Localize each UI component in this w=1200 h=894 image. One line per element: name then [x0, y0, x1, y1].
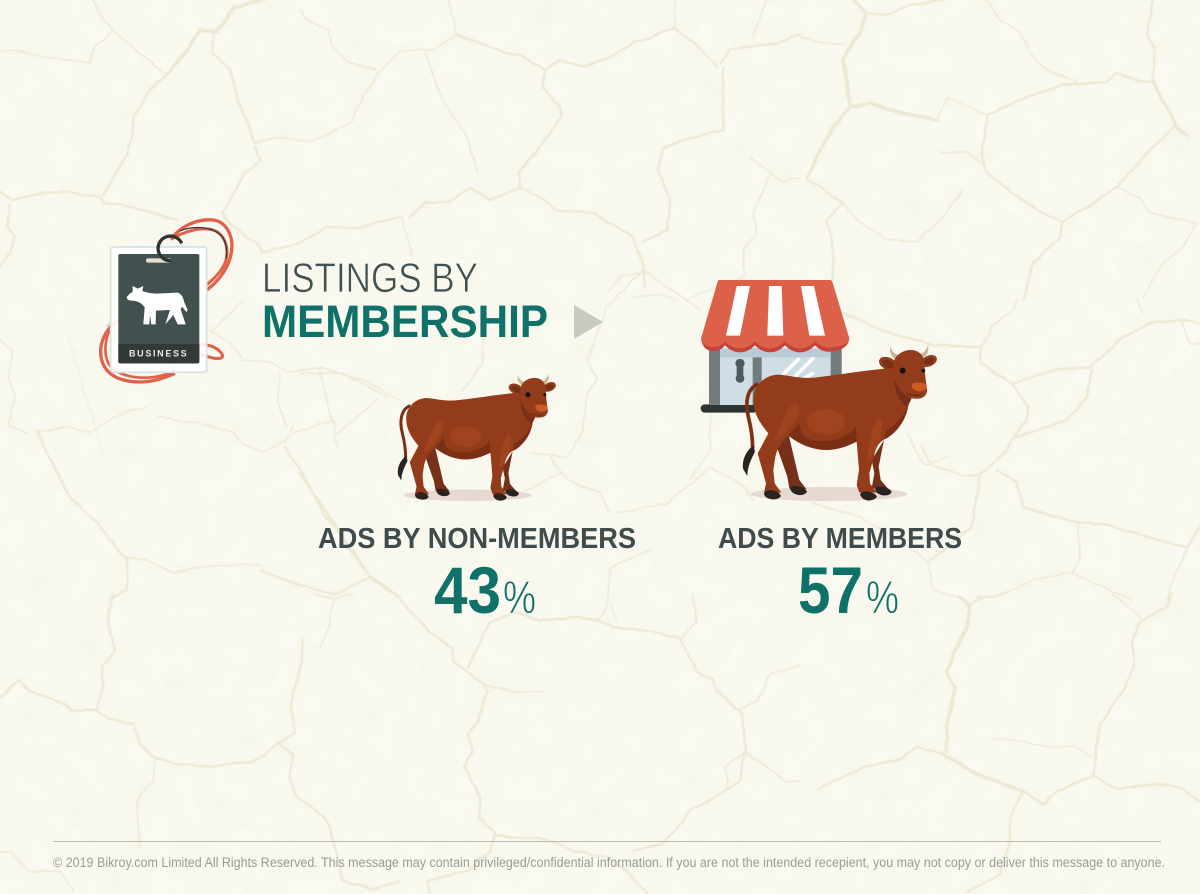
stat: 43 percent: 43: [434, 553, 501, 627]
icon: shop stall: [701, 280, 849, 413]
label: ads by members: ADS BY MEMBERS: [718, 523, 962, 555]
icon: cow, non-members: [398, 374, 557, 501]
arrow: [574, 305, 603, 339]
title: [262, 254, 548, 347]
stat: 57 percent: %: [866, 571, 899, 623]
icon: business membership badge with lanyard: [101, 220, 232, 382]
label: ads by non-members: ADS BY NON-MEMBERS: [318, 523, 636, 555]
title: LISTINGS BY: [262, 254, 478, 301]
icon: cow, members: [743, 345, 939, 501]
stat: 43 percent: %: [503, 571, 536, 623]
title: MEMBERSHIP: [262, 296, 548, 347]
icon: business membership badge with lanyard: BUSINESS: [129, 349, 187, 359]
stat: 57 percent: 57: [798, 553, 863, 627]
